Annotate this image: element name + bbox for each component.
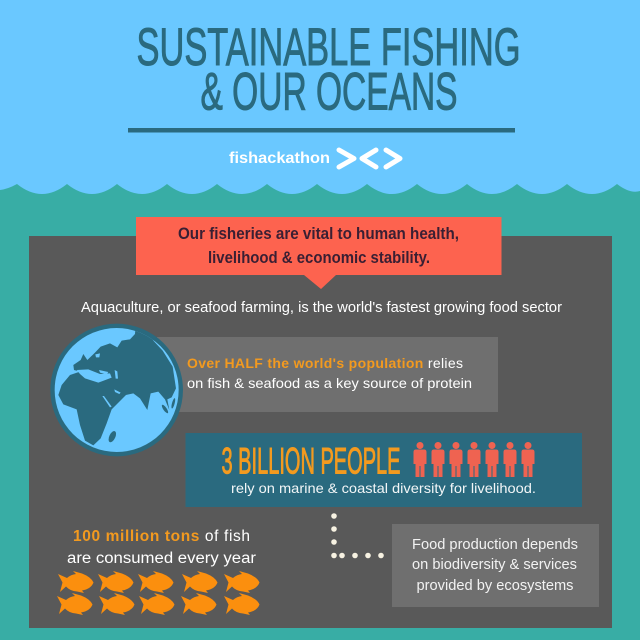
icon: globe [50,320,183,456]
title: & OUR OCEANS [200,62,458,122]
panel: half the population: on fish & seafood as a key source of protein [187,375,472,391]
logo: fishackathon: fishackathon [229,150,330,167]
livelihood text: rely on marine & coastal diversity for livelihood. [231,481,536,496]
callout banner: livelihood & economic stability. [208,249,430,267]
panel: food production: on biodiversity & services [412,557,577,573]
aquaculture text: Aquaculture, or seafood farming, is the world's fastest growing food sector [81,300,562,316]
callout banner [136,217,502,289]
icon group: fish [57,571,260,615]
panel: food production: provided by ecosystems [416,578,574,594]
tons of fish text: 100 million tons of fish [73,528,250,545]
water with scalloped waves [0,184,640,640]
panel: 3 billion people [186,433,582,507]
logo: fishackathon [229,150,400,167]
title [136,18,520,122]
panel: half the population: Over HALF the world's population relies [187,355,463,371]
panel: half the population [157,337,498,412]
callout banner: Our fisheries are vital to human health, [178,225,459,243]
tons of fish text [67,528,256,567]
icon row: people [414,442,534,477]
dotted connector [331,513,384,558]
panel: food production [392,524,599,607]
tons of fish text: are consumed every year [67,550,256,567]
title rule [128,128,515,132]
main dark panel [29,236,612,628]
big number heading: 3 BILLION PEOPLE [222,440,400,482]
panel: food production: Food production depends [412,537,578,553]
